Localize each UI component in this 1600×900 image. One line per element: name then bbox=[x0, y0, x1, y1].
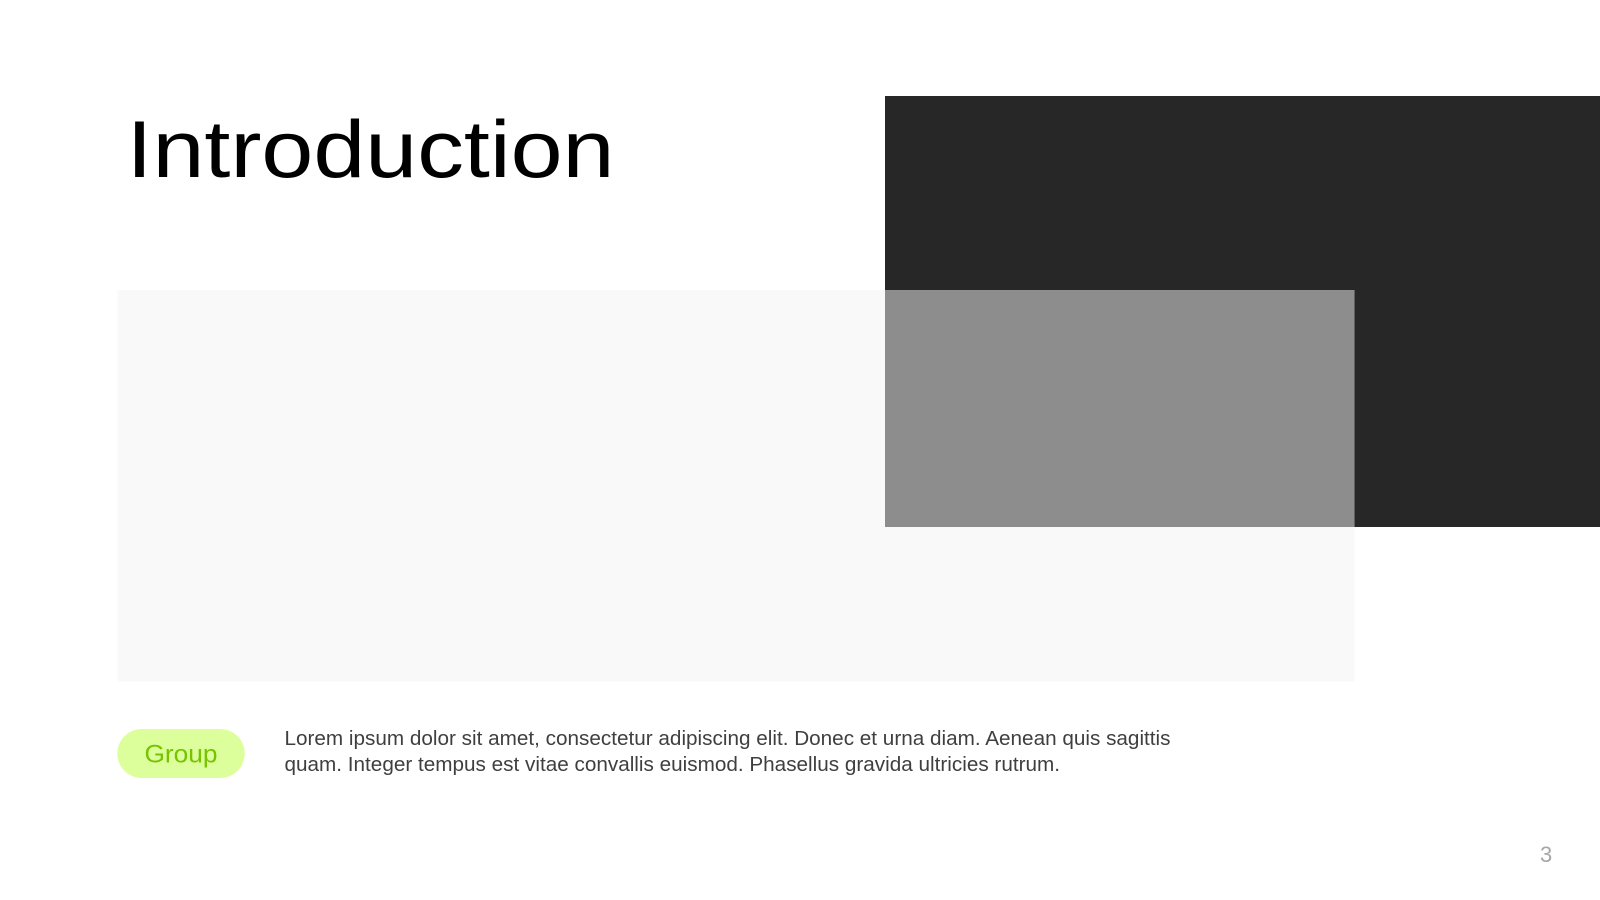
body line 1: Lorem ipsum dolor sit amet, consectetur adipiscing elit. Donec et urna diam. Aenean quis sagittis bbox=[284, 728, 1170, 750]
title: Introduction bbox=[126, 105, 614, 195]
tag label: Group bbox=[144, 740, 218, 768]
tag: Group bbox=[117, 729, 245, 778]
panel: light placeholder bbox=[117, 290, 1354, 682]
page number: 3 bbox=[1540, 842, 1552, 867]
panel: dark block bbox=[885, 96, 1600, 527]
body line 2: quam. Integer tempus est vitae convallis euismod. Phasellus gravida ultricies rutrum. bbox=[284, 754, 1060, 776]
body text bbox=[284, 728, 1170, 776]
tag background bbox=[117, 729, 245, 778]
panel: gray overlap bbox=[885, 290, 1354, 527]
